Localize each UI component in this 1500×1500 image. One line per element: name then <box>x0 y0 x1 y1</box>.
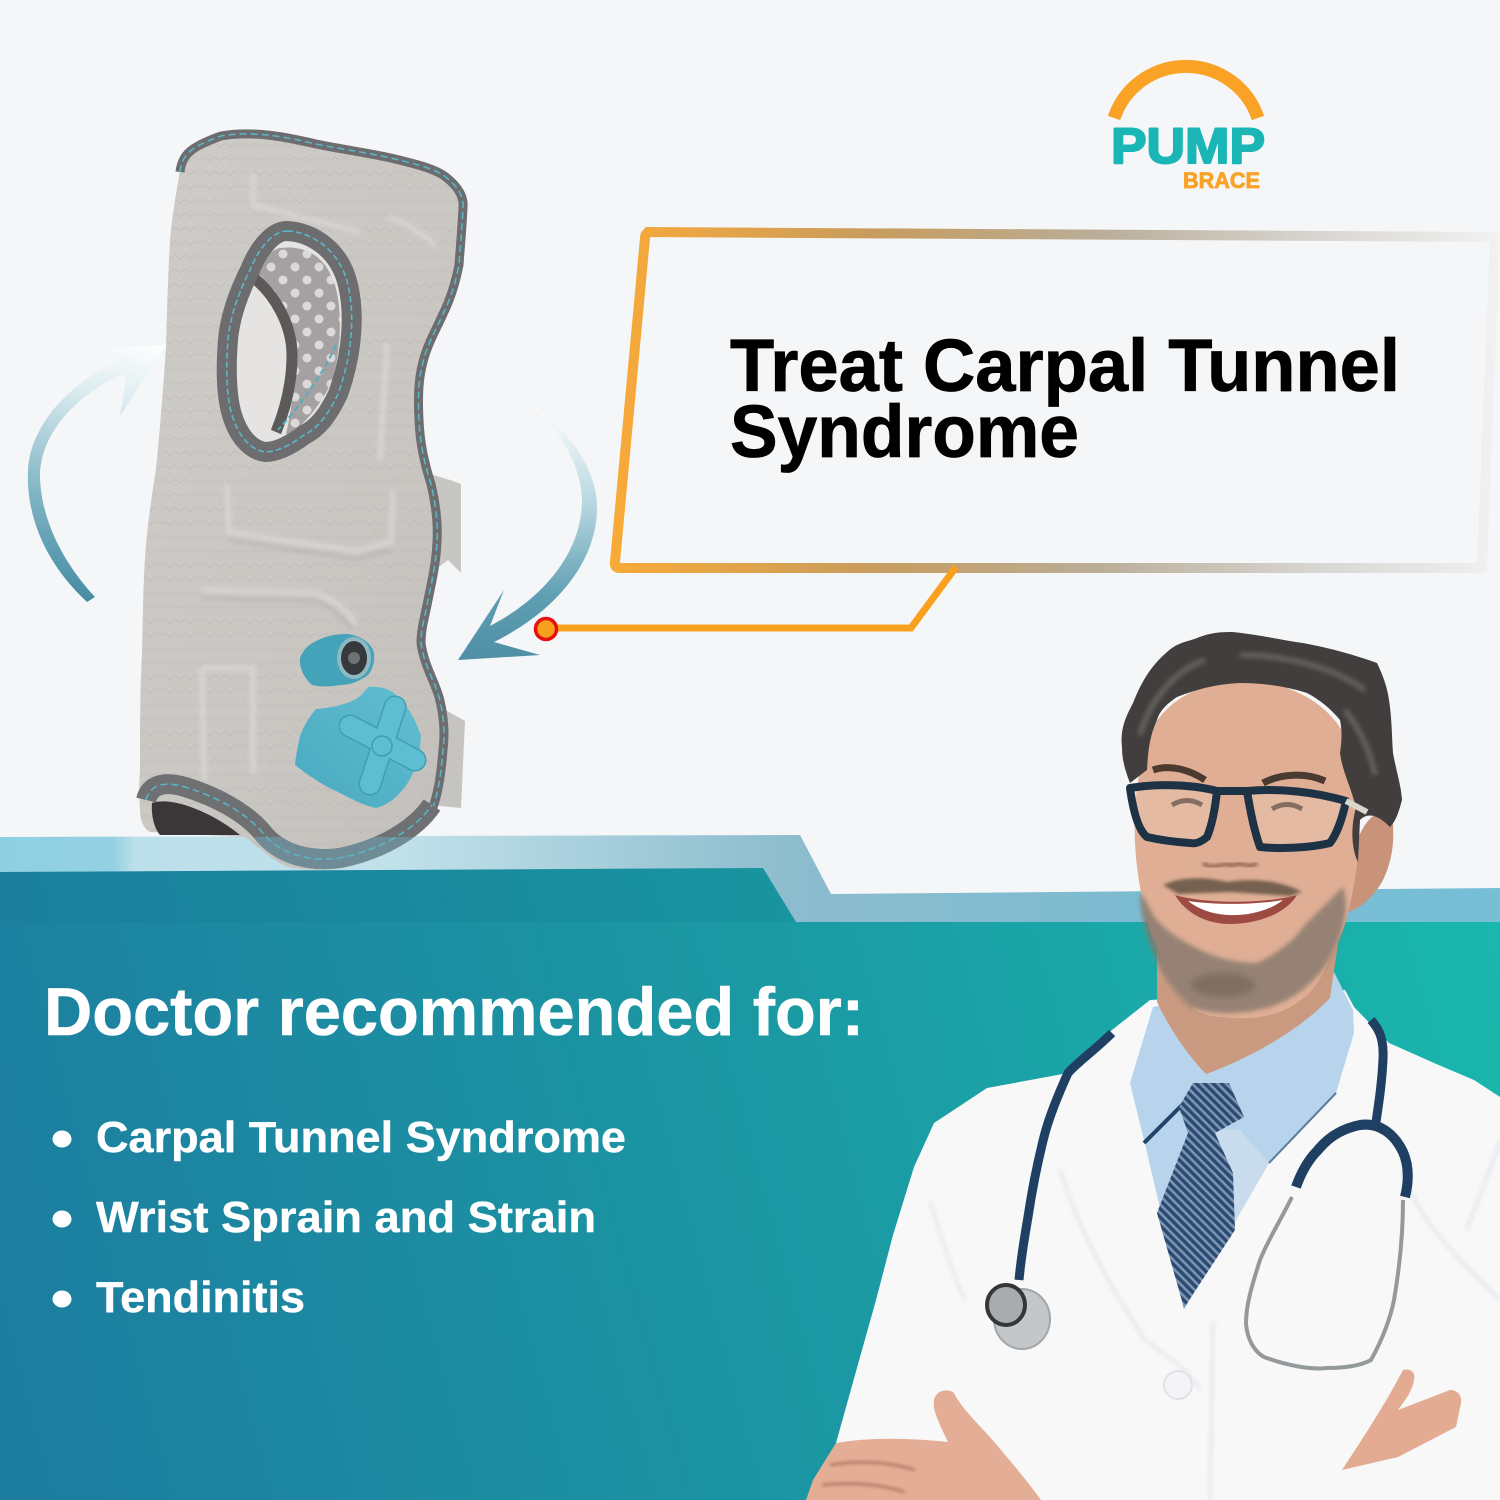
shirt <box>1130 970 1354 1310</box>
cuff stitching <box>146 784 432 859</box>
chest piece back <box>994 1289 1050 1349</box>
coat folds <box>930 1140 1500 1500</box>
callout heading: Syndrome <box>730 390 1079 473</box>
logo word BRACE: BRACE <box>1183 168 1260 193</box>
metal ear loop <box>1246 1197 1403 1368</box>
rim of hole <box>227 231 352 452</box>
logo: Pump Brace <box>1111 66 1265 193</box>
logo word PUMP: PUMP <box>1111 118 1265 174</box>
tube to chest piece <box>1019 1033 1112 1280</box>
neck <box>1157 930 1340 1074</box>
chest piece front <box>987 1285 1025 1325</box>
hand pump <box>295 687 421 808</box>
doctor portrait <box>806 632 1500 1500</box>
conditions list <box>52 1113 626 1322</box>
tie <box>1157 1083 1244 1308</box>
eyes <box>1172 800 1302 809</box>
coat edge line right <box>1269 1093 1336 1163</box>
right hand <box>1342 1369 1461 1470</box>
left hand <box>806 1390 1041 1500</box>
teal lower panel <box>0 868 1500 1500</box>
logo arc <box>1114 66 1258 118</box>
glasses temple <box>1346 801 1367 812</box>
chin shadow <box>1191 973 1255 997</box>
weave texture <box>139 134 463 870</box>
white coat <box>806 990 1500 1500</box>
wrist brace product <box>139 134 465 870</box>
inner dark strap <box>254 278 292 432</box>
embossed relief <box>202 173 435 780</box>
cuff tinted over band <box>253 837 414 870</box>
thumb hole <box>227 231 352 452</box>
bottom cuff <box>146 784 432 859</box>
brace body <box>139 134 463 870</box>
callout heading <box>730 324 1400 473</box>
air valve <box>300 634 374 686</box>
hair highlights <box>1140 655 1375 775</box>
eyebrows <box>1153 768 1325 783</box>
nose shadow <box>1203 863 1257 866</box>
teeth <box>1188 900 1283 915</box>
pump cross mark <box>350 707 415 784</box>
callout leader line <box>546 567 956 628</box>
callout frame <box>536 232 1495 640</box>
darker strip at top of panel <box>0 868 796 922</box>
smile <box>1175 895 1297 924</box>
finger gaps <box>822 1462 915 1492</box>
light blue upper band <box>0 835 1500 960</box>
ear <box>1348 813 1393 912</box>
item: tendinitis: Tendinitis <box>96 1273 305 1322</box>
moustache <box>1163 878 1302 896</box>
beard <box>1140 887 1346 1013</box>
cuff opening <box>152 801 240 835</box>
upper side strap <box>430 474 461 573</box>
panel heading: Doctor recommended for: <box>44 974 864 1050</box>
stethoscope <box>987 1020 1408 1368</box>
glasses <box>1130 785 1367 848</box>
rotation arrow left <box>28 345 166 602</box>
strap stitching <box>278 345 336 430</box>
head <box>1135 681 1359 1018</box>
shirt front below collar <box>1184 1130 1269 1310</box>
rim stitching <box>227 231 352 452</box>
rotation arrow right <box>458 406 597 660</box>
coat button <box>1164 1371 1192 1399</box>
ear tube fork <box>1296 1125 1408 1197</box>
lower side strap <box>430 704 465 808</box>
neck tube right <box>1371 1020 1383 1122</box>
crossed hands <box>806 1369 1461 1500</box>
callout anchor dot <box>536 618 556 640</box>
collar shadow <box>1144 1105 1182 1143</box>
item: carpal tunnel: Carpal Tunnel Syndrome <box>96 1113 626 1162</box>
callout heading: Treat Carpal Tunnel <box>730 324 1400 407</box>
grey binding along top and right edge <box>180 134 463 813</box>
polka dot lining <box>255 247 340 438</box>
hair <box>1122 632 1402 862</box>
teal stitching <box>180 134 463 813</box>
item: wrist sprain: Wrist Sprain and Strain <box>96 1193 596 1242</box>
